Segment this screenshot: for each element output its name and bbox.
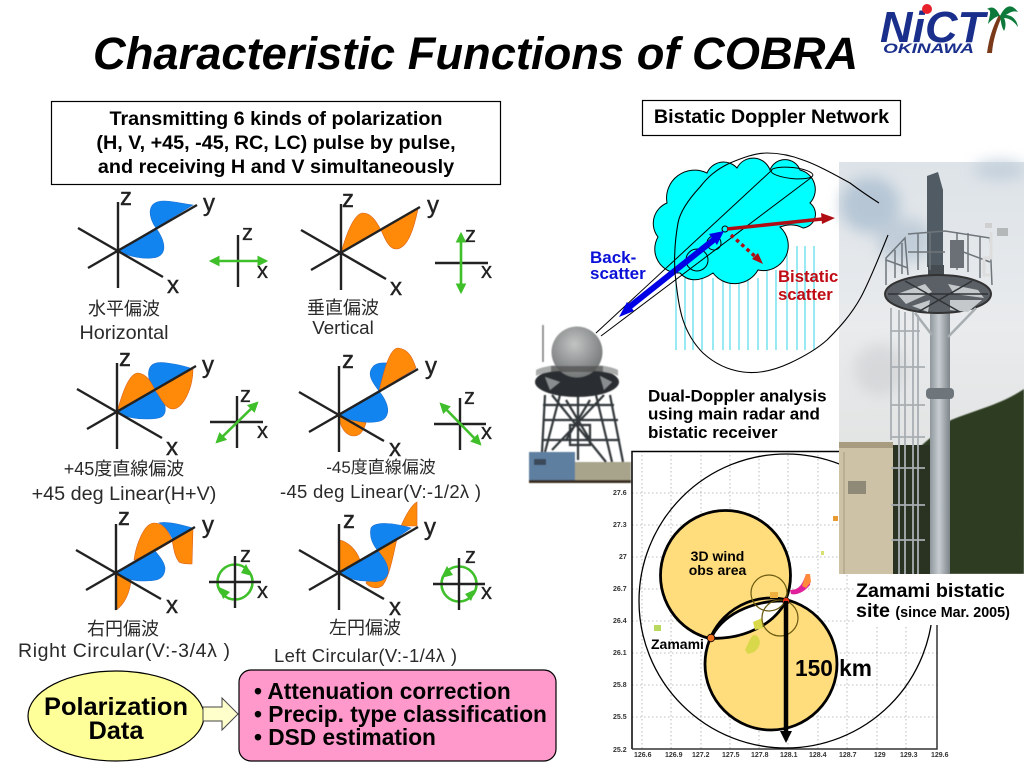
- caption: Zamami bistatic site: Zamami bistatic: [856, 580, 1005, 602]
- panel: horizontal polarization: z: [120, 184, 132, 211]
- panel: +45 degree linear polarization: [32, 345, 268, 505]
- panel: -45 degree linear polarization: z: [464, 384, 475, 409]
- rain streaks: [676, 246, 814, 350]
- panel: -45 degree linear polarization: -45度直線偏波: [326, 458, 436, 477]
- map: dual-Doppler coverage: [613, 451, 949, 759]
- title: Characteristic Functions of COBRA: [93, 28, 858, 79]
- panel: +45 degree linear polarization: +45 deg Linear(H+V): [32, 483, 216, 505]
- panel: left circular polarization: y: [424, 514, 436, 541]
- panel: right circular polarization: Right Circular(V:-3/4λ ): [18, 640, 230, 662]
- equipment building: [839, 442, 893, 574]
- map axis tick labels: 126.6: [634, 752, 652, 759]
- pink result box: • DSD estimation: [254, 724, 436, 750]
- panel: +45 degree linear polarization: z: [119, 345, 131, 372]
- panel: right circular polarization: 右円偏波: [87, 619, 159, 639]
- panel: vertical polarization: Vertical: [312, 317, 374, 338]
- panel: vertical polarization: y: [427, 192, 439, 219]
- panel: left circular polarization: Left Circular(V:-1/4λ ): [274, 645, 457, 666]
- panel: -45 degree linear polarization: [280, 347, 492, 502]
- panel: vertical polarization: x: [390, 274, 402, 301]
- yellow dual-Doppler lobes: [660, 510, 837, 730]
- blue backscatter arrow: [619, 231, 724, 317]
- map axis tick labels: 129: [874, 752, 886, 759]
- polarization data oval: Polarization: [44, 693, 188, 721]
- red bistatic arrow: [727, 213, 835, 229]
- rain echoes: [654, 516, 838, 654]
- panel: vertical polarization: z: [342, 186, 354, 213]
- polarization data oval: Data: [88, 717, 144, 745]
- panel: vertical polarization: 垂直偏波: [307, 298, 379, 318]
- map axis tick labels: 25.5: [613, 714, 627, 721]
- heading: bistatic doppler network: Bistatic Doppler Network: [654, 106, 890, 128]
- panel: left circular polarization: [274, 502, 492, 666]
- radiation pattern curve: [675, 153, 888, 373]
- label: bistatic scatter: [778, 267, 838, 304]
- cloud: [653, 158, 815, 284]
- caption: Zamami bistatic site: site (since Mar. 2005): [856, 600, 1010, 622]
- text box: transmitting polarization: (H, V, +45, -45, RC, LC) pulse by pulse,: [96, 132, 456, 154]
- panel: left circular polarization: x: [481, 579, 492, 604]
- pink result box: [239, 670, 556, 761]
- map: dual-Doppler coverage: 3D wind: [691, 548, 744, 564]
- text: dual-Doppler analysis: [648, 386, 827, 442]
- panel: right circular polarization: y: [202, 512, 214, 539]
- map axis tick labels: 129.3: [900, 752, 918, 759]
- ladder: [891, 308, 925, 574]
- text box: transmitting polarization: and receiving H and V simultaneously: [98, 156, 454, 178]
- map axis tick labels: 128.4: [809, 752, 827, 759]
- text: dual-Doppler analysis: Dual-Doppler analysis: [648, 386, 827, 406]
- map axis tick labels: 27: [619, 554, 627, 561]
- 150 km range arrow: 150 km: [795, 655, 872, 681]
- map axis tick labels: 128.1: [780, 752, 798, 759]
- dotted red arrow: [731, 235, 763, 264]
- panel: +45 degree linear polarization: y: [202, 352, 214, 379]
- panel: horizontal polarization: [78, 184, 268, 344]
- pink result box: • Precip. type classification: [254, 701, 547, 727]
- block arrow: [203, 698, 238, 730]
- pink result box: • Attenuation correction: [254, 678, 511, 704]
- panel: horizontal polarization: 水平偏波: [88, 299, 160, 319]
- text: dual-Doppler analysis: using main radar and: [648, 404, 820, 424]
- panel: left circular polarization: 左円偏波: [329, 618, 401, 638]
- panel: -45 degree linear polarization: z: [342, 347, 354, 374]
- panel: vertical polarization: [301, 186, 492, 338]
- panel: right circular polarization: [18, 504, 268, 662]
- map axis tick labels: [613, 490, 949, 759]
- map axis tick labels: 25.8: [613, 682, 627, 689]
- polarization data oval: [28, 671, 204, 761]
- map axis tick labels: 128.7: [839, 752, 857, 759]
- map: dual-Doppler coverage: Zamami: [651, 636, 704, 652]
- panel: -45 degree linear polarization: -45 deg Linear(V:-1/2λ ): [280, 481, 481, 502]
- label: backscatter: scatter: [590, 264, 646, 283]
- logo: NICT Okinawa: NiCT: [880, 3, 988, 52]
- panel: +45 degree linear polarization: x: [166, 434, 178, 461]
- map axis tick labels: 126.9: [665, 752, 683, 759]
- panel: horizontal polarization: x: [167, 272, 179, 299]
- map axis tick labels: 25.2: [613, 747, 627, 754]
- panel: -45 degree linear polarization: y: [425, 353, 437, 380]
- panel: +45 degree linear polarization: x: [257, 418, 268, 443]
- caption: Zamami bistatic site: [855, 574, 1024, 625]
- map axis tick labels: 27.6: [613, 490, 627, 497]
- text box: transmitting polarization: [52, 102, 500, 184]
- photo: Zamami bistatic tower: [839, 160, 1024, 574]
- panel: left circular polarization: z: [465, 543, 476, 568]
- mast: [930, 300, 950, 574]
- panel: horizontal polarization: z: [242, 220, 253, 245]
- panel: horizontal polarization: Horizontal: [79, 322, 169, 344]
- map axis tick labels: 129.6: [931, 752, 949, 759]
- panel: +45 degree linear polarization: z: [240, 382, 251, 407]
- heading: bistatic doppler network: [642, 100, 900, 136]
- map axis tick labels: 26.4: [613, 618, 627, 625]
- logo: NICT Okinawa: OKINAWA: [883, 40, 974, 56]
- text: dual-Doppler analysis: bistatic receiver: [648, 423, 778, 442]
- hillside: [893, 389, 1024, 574]
- text box: transmitting polarization: Transmitting 6 kinds of polarization: [109, 108, 443, 130]
- railing and platform: [886, 231, 992, 285]
- map axis tick labels: 27.3: [613, 522, 627, 529]
- 150 km range arrow: [780, 601, 872, 743]
- panel: +45 degree linear polarization: +45度直線偏波: [64, 459, 184, 479]
- map axis tick labels: 127.5: [722, 752, 740, 759]
- panel: horizontal polarization: x: [257, 258, 268, 283]
- panel: left circular polarization: x: [389, 594, 401, 621]
- label: backscatter: [590, 248, 646, 283]
- panel: vertical polarization: z: [465, 222, 476, 247]
- label: bistatic scatter: Bistatic: [778, 267, 838, 286]
- panel: -45 degree linear polarization: x: [389, 435, 401, 462]
- panel: horizontal polarization: y: [203, 190, 215, 217]
- diagram: bistatic scattering: [590, 158, 835, 350]
- map axis tick labels: 26.7: [613, 586, 627, 593]
- panel: right circular polarization: z: [240, 542, 251, 567]
- beam: [596, 170, 812, 336]
- photo: main radar tower: [529, 325, 631, 483]
- panel: vertical polarization: x: [481, 258, 492, 283]
- panel: right circular polarization: x: [257, 578, 268, 603]
- map axis tick labels: 127.8: [751, 752, 769, 759]
- panel: right circular polarization: z: [118, 504, 130, 531]
- map axis tick labels: 26.1: [613, 650, 627, 657]
- label: bistatic scatter: scatter: [778, 285, 833, 304]
- map: dual-Doppler coverage: obs area: [689, 562, 747, 578]
- panel: left circular polarization: z: [343, 507, 355, 534]
- anemometer: [984, 232, 991, 275]
- map axis tick labels: 127.2: [692, 752, 710, 759]
- panel: right circular polarization: x: [166, 592, 178, 619]
- logo: NICT Okinawa: [880, 3, 1018, 56]
- label: backscatter: Back-: [590, 248, 636, 267]
- panel: -45 degree linear polarization: x: [481, 419, 492, 444]
